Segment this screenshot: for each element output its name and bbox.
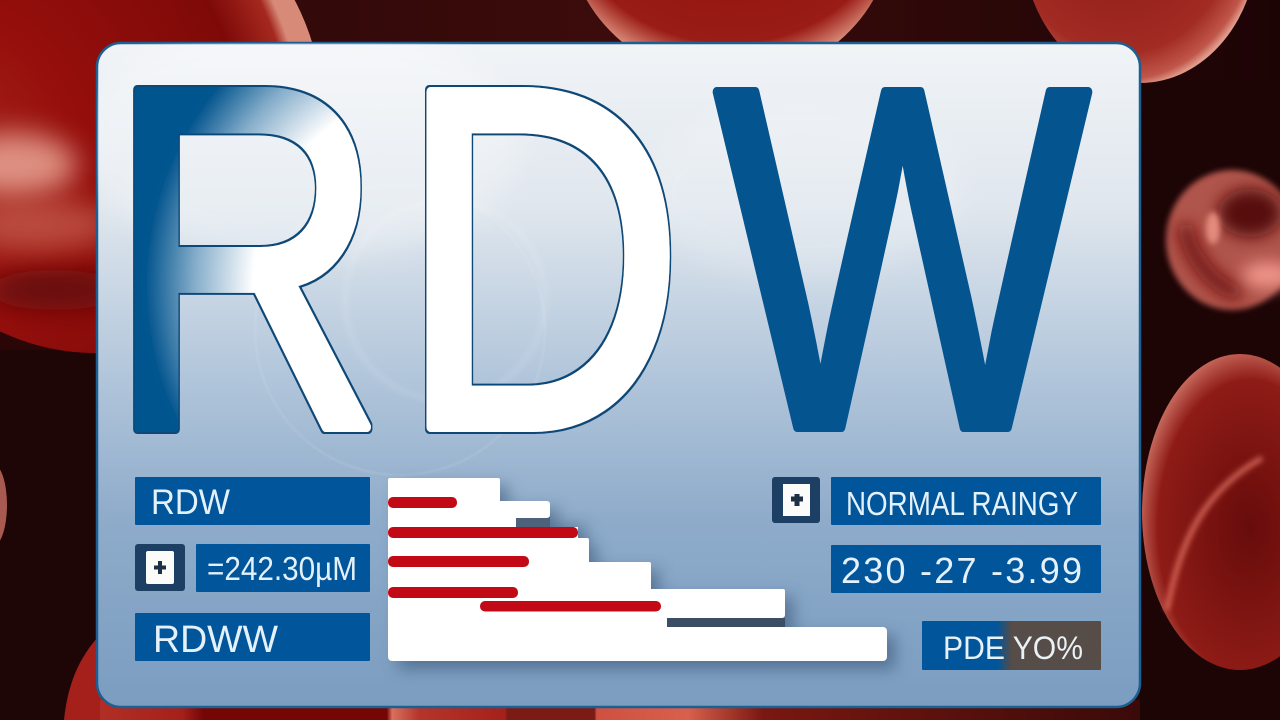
title letter W: W xyxy=(715,0,1093,531)
red bar 5 xyxy=(480,601,661,612)
label: range values: 230 -27 -3.99 xyxy=(841,550,1082,591)
label: RDWW xyxy=(135,613,370,661)
bar chart xyxy=(388,478,895,669)
title letter D: D xyxy=(398,0,685,531)
icon: plus badge right xyxy=(772,477,820,523)
panel: glass card xyxy=(80,20,1140,707)
label: RDW xyxy=(135,477,370,525)
label: RDWW: RDWW xyxy=(153,619,278,661)
label: normal range xyxy=(831,477,1101,525)
label: normal range: NORMAL RAINGY xyxy=(846,485,1078,522)
icon: plus badge left xyxy=(135,544,185,591)
label: percent tag xyxy=(922,621,1101,670)
red bar 4 xyxy=(388,587,518,598)
label: percent tag: PDE YO% xyxy=(943,630,1083,666)
label: RDW: RDW xyxy=(151,483,230,522)
red bar 3 xyxy=(388,556,529,567)
label: value: =242.30µM xyxy=(207,550,357,587)
title letter R: R xyxy=(107,0,385,530)
red bar 2 xyxy=(388,527,578,538)
red bar 1 xyxy=(388,497,457,508)
